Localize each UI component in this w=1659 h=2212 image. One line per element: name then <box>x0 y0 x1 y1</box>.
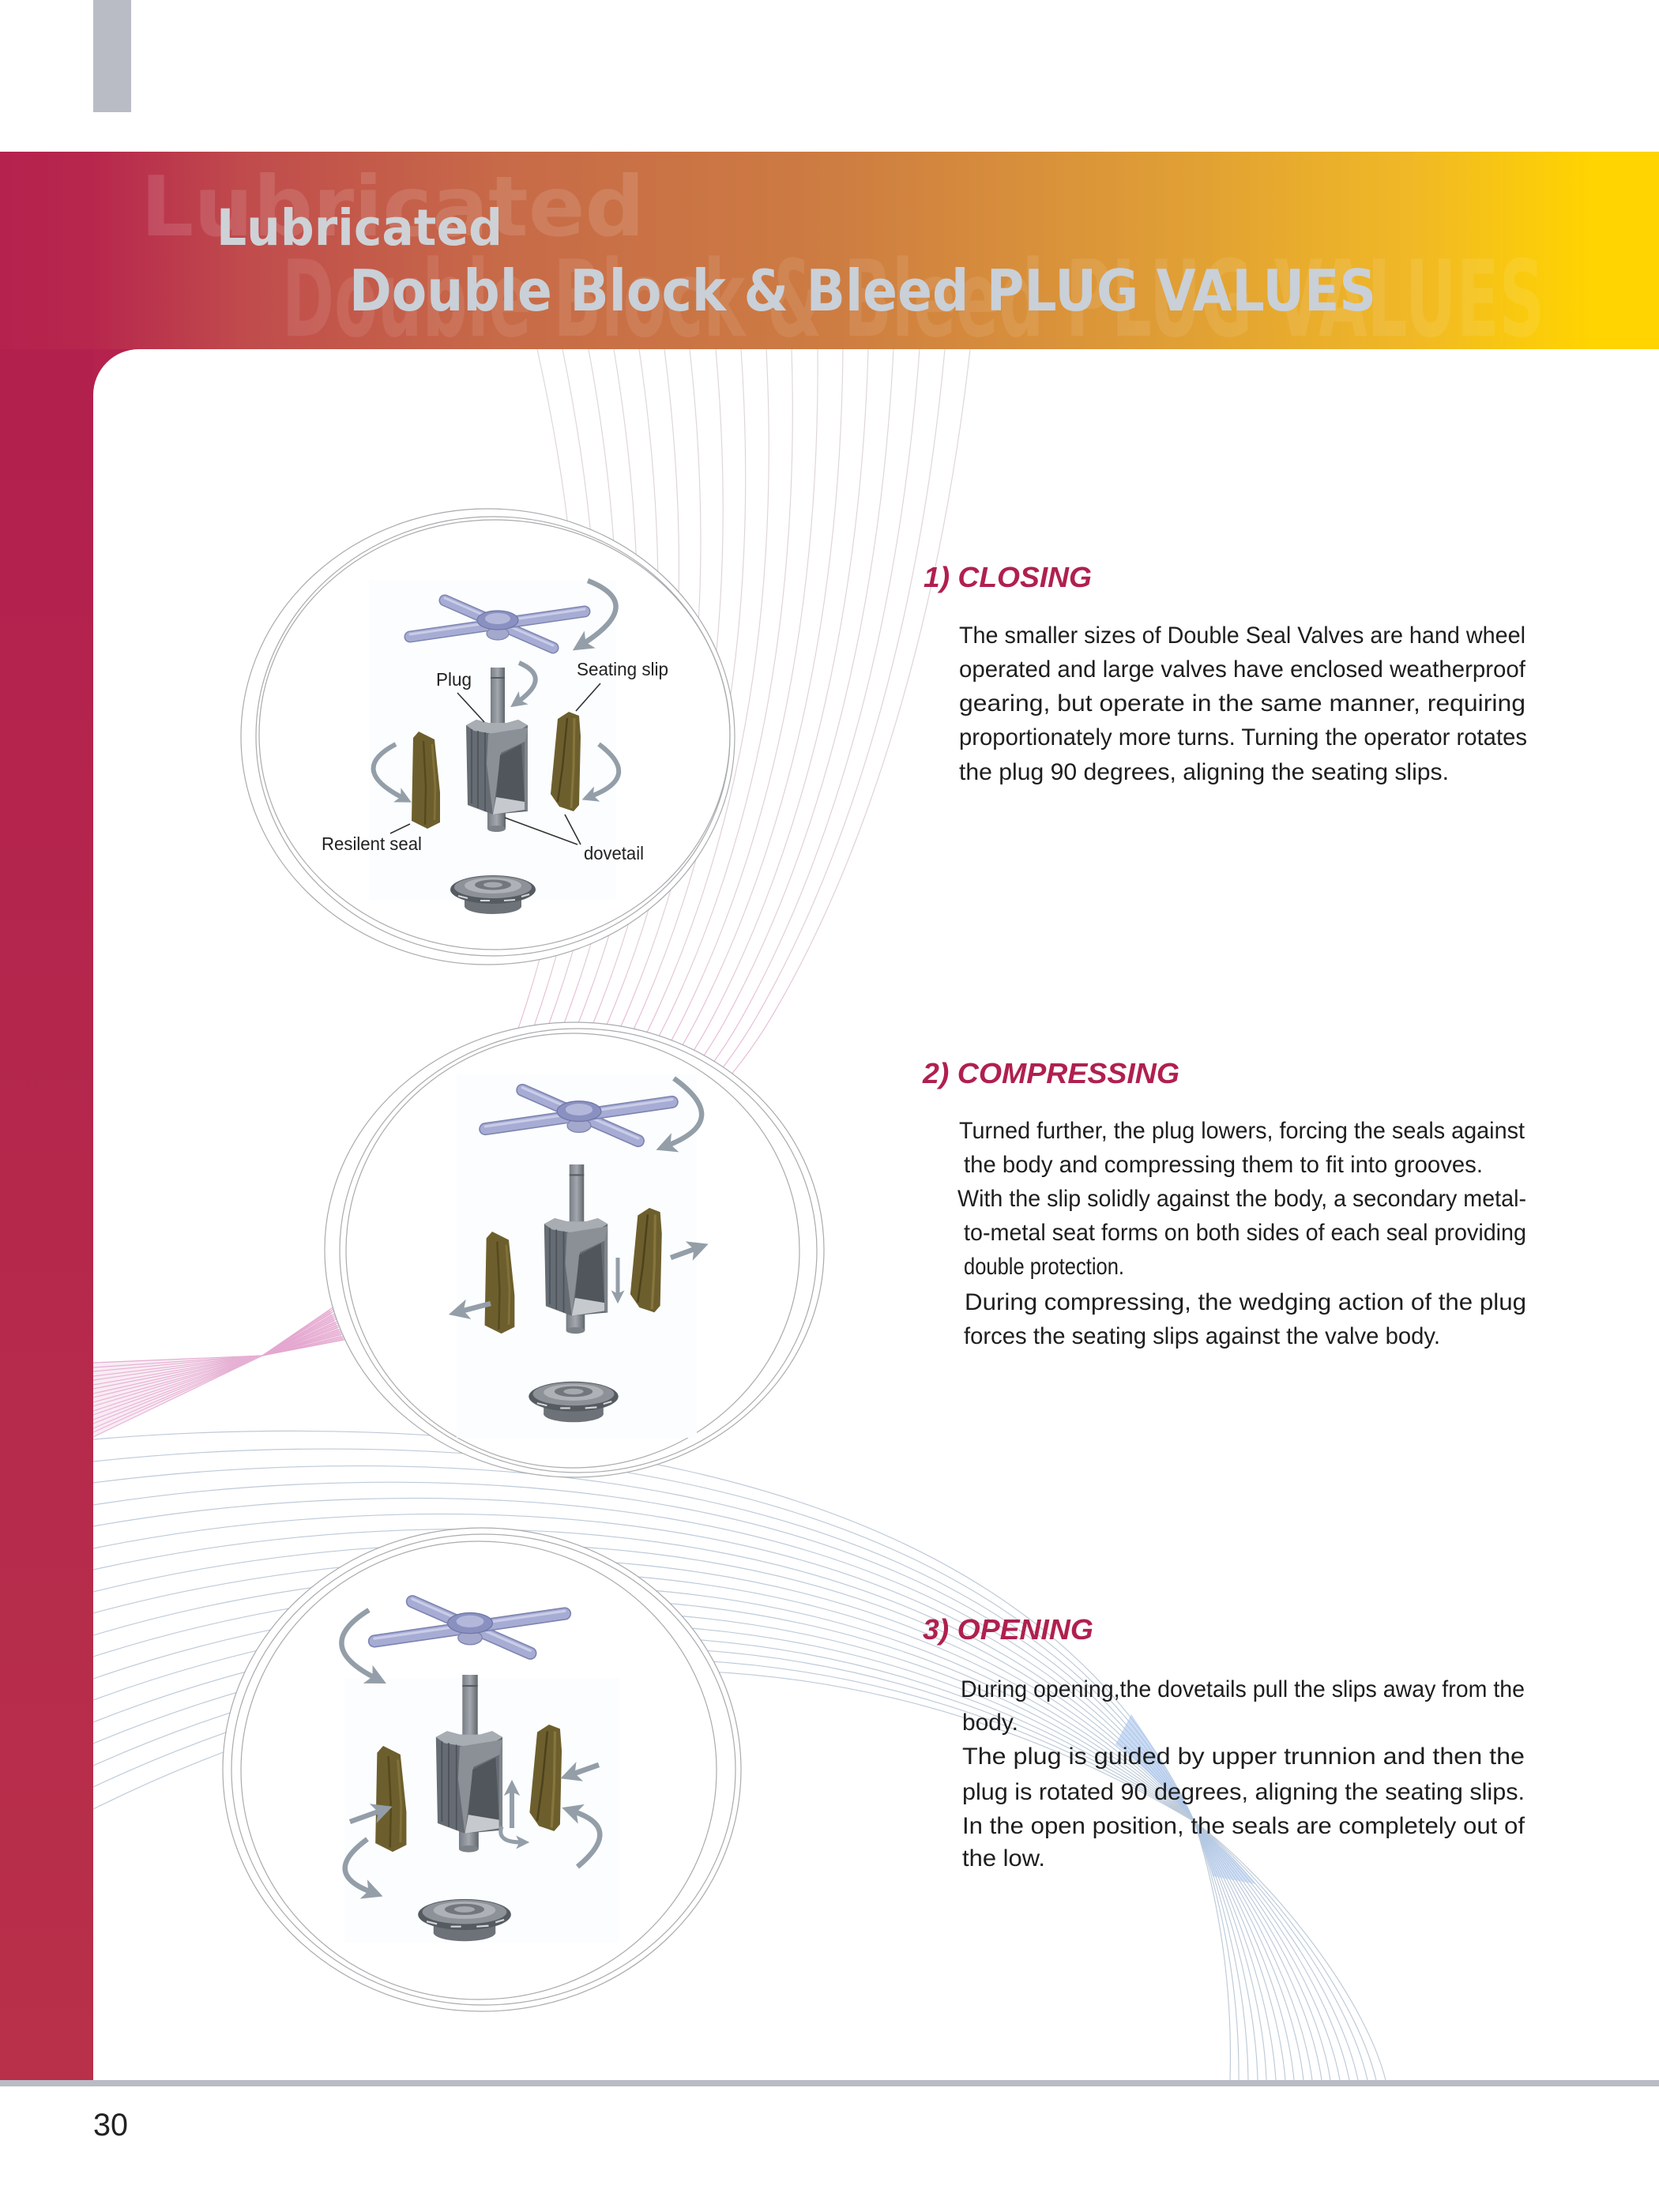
motion arrows <box>461 1078 702 1311</box>
body text: the plug 90 degrees, aligning the seating slips. <box>959 759 1449 785</box>
label: Plug: Plug <box>436 669 472 690</box>
title line 2: Double Block & Bleed PLUG VALUES <box>349 258 1376 324</box>
body text: During opening,the dovetails pull the slips away from the <box>961 1676 1525 1702</box>
body text <box>959 623 1527 785</box>
background pink line fan <box>93 349 970 1437</box>
leader lines <box>390 683 600 845</box>
icon: right seating slip <box>529 1725 562 1831</box>
icon: plug <box>544 1164 608 1334</box>
red sidebar <box>0 340 93 2080</box>
page number: 30 <box>93 2108 128 2142</box>
banner ghost title line 1: Lubricated <box>141 159 645 255</box>
icon: plug <box>466 668 528 832</box>
icon: hand wheel <box>410 598 585 648</box>
icon: lower flange <box>529 1382 619 1422</box>
heading: 2) COMPRESSING <box>922 1057 1179 1089</box>
icon: lower flange <box>418 1899 511 1941</box>
icon: plug <box>436 1675 502 1853</box>
body text: forces the seating slips against the valve body. <box>964 1323 1440 1349</box>
body text: to-metal seat forms on both sides of each seal providing <box>964 1220 1526 1246</box>
panel: opening text <box>923 1613 1525 1872</box>
icon: right seating slip <box>551 712 581 811</box>
body text: plug is rotated 90 degrees, aligning the seating slips. <box>962 1779 1525 1805</box>
icon: hand wheel <box>485 1088 672 1141</box>
body text: the low. <box>962 1845 1045 1872</box>
body text: proportionately more turns. Turning the operator rotates <box>959 724 1527 750</box>
heading: 3) OPENING <box>923 1613 1093 1646</box>
diagram: opening <box>223 1528 741 2011</box>
title line 1: Lubricated <box>216 199 502 257</box>
label: dovetail: dovetail <box>584 843 644 863</box>
body text: body. <box>962 1710 1018 1736</box>
body text: In the open position, the seals are completely out of <box>962 1813 1525 1839</box>
icon: right seating slip <box>630 1208 662 1312</box>
body text <box>957 1118 1526 1349</box>
body text: With the slip solidly against the body, a secondary metal- <box>957 1186 1526 1212</box>
body text: operated and large valves have enclosed weatherproof <box>959 656 1526 683</box>
body text: double protection. <box>964 1254 1124 1280</box>
body text: the body and compressing them to fit into grooves. <box>964 1152 1483 1178</box>
motion arrows <box>341 1610 600 1892</box>
icon: left seal <box>412 732 440 829</box>
icon: left seal <box>485 1232 514 1334</box>
body text <box>961 1676 1525 1872</box>
panel: compressing text <box>922 1057 1526 1349</box>
body text: Turned further, the plug lowers, forcing the seals against <box>959 1118 1525 1144</box>
icon: hand wheel <box>374 1599 565 1653</box>
rounded corner of white panel <box>93 349 139 395</box>
body text: During compressing, the wedging action of the plug <box>965 1289 1526 1315</box>
panel: closing text <box>924 561 1527 785</box>
label: Resilent seal: Resilent seal <box>322 833 422 854</box>
diagram: compressing <box>325 1022 824 1477</box>
body text: The smaller sizes of Double Seal Valves are hand wheel <box>959 623 1525 649</box>
page rule <box>0 2080 1659 2086</box>
body text: The plug is guided by upper trunnion and then the <box>962 1744 1525 1770</box>
rotation arrows <box>374 581 619 798</box>
icon: lower flange <box>450 875 536 914</box>
body text: gearing, but operate in the same manner, requiring <box>959 690 1525 717</box>
heading: 1) CLOSING <box>924 561 1092 593</box>
grey corner tab <box>93 0 131 112</box>
label: Seating slip: Seating slip <box>577 659 668 679</box>
diagram: closing <box>241 509 735 965</box>
background blue line fan <box>93 1431 1386 2080</box>
icon: left seal <box>375 1746 406 1852</box>
header banner <box>0 152 1659 349</box>
